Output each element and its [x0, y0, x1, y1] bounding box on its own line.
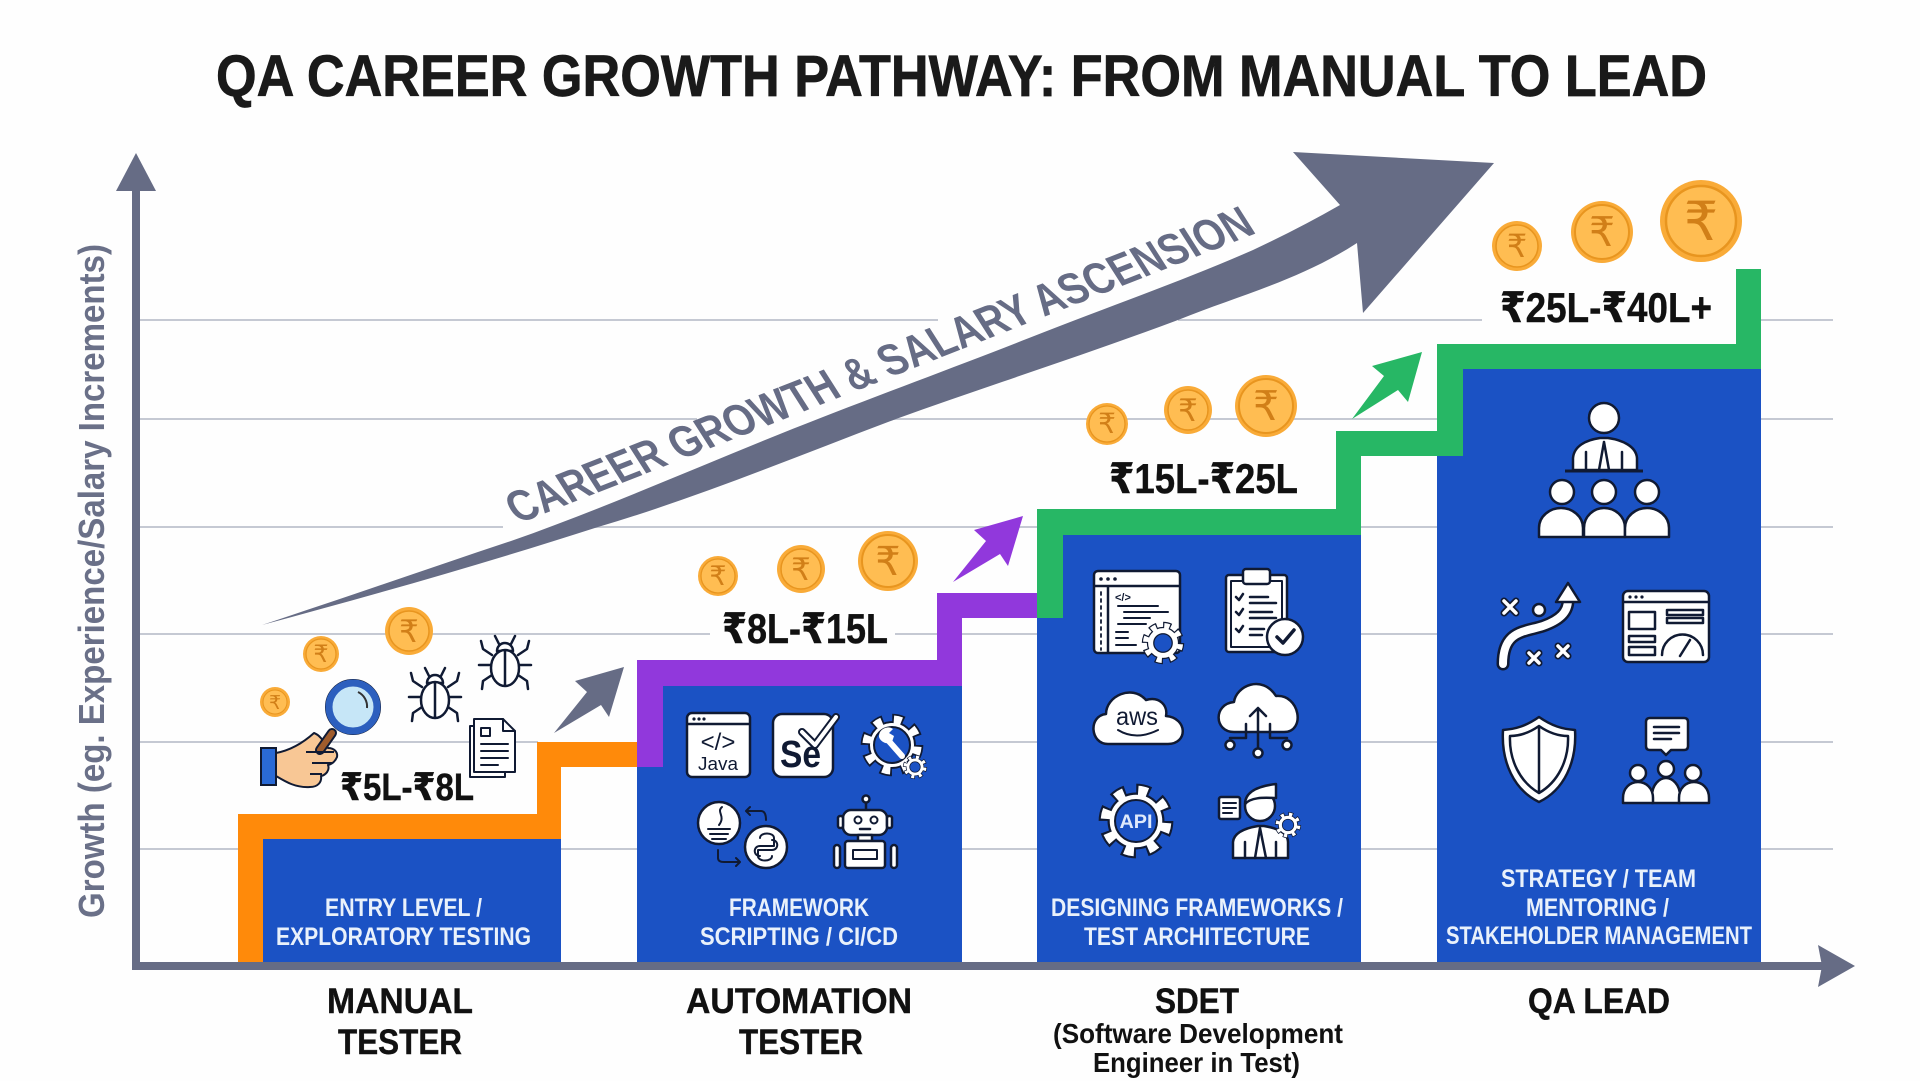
manual tester description: EXPLORATORY TESTING [276, 923, 531, 951]
step arrow: gray [554, 667, 624, 733]
title: QA CAREER GROWTH PATHWAY: FROM MANUAL TO LEAD [216, 44, 1707, 109]
coins: qa lead: ₹ [1684, 192, 1718, 252]
icon: selenium: Se [780, 734, 821, 776]
salary: qa lead: ₹25L-₹40L+ [1500, 284, 1712, 331]
icon: team discussion [1623, 718, 1709, 803]
coins: sdet [1086, 375, 1297, 445]
role labels: TESTER [739, 1023, 863, 1062]
role labels: QA LEAD [1528, 982, 1670, 1021]
icon: cloud upload [1219, 684, 1298, 758]
step arrow: purple [953, 516, 1023, 582]
icon: dashboard [1623, 591, 1709, 662]
column: sdet [1037, 431, 1437, 962]
coins: automation: ₹ [875, 540, 901, 584]
icon: selenium [773, 714, 836, 777]
column: automation tester [637, 593, 1037, 962]
salary: manual: ₹5L-₹8L [340, 767, 474, 809]
role labels: MANUAL [327, 982, 473, 1021]
coins: manual [260, 607, 433, 717]
icon: hand with magnifier [261, 680, 380, 787]
icon: gear wrench [867, 720, 925, 777]
role labels: TESTER [338, 1023, 462, 1062]
icon: checklist clipboard [1226, 569, 1303, 655]
qa lead description: STAKEHOLDER MANAGEMENT [1446, 922, 1752, 950]
icon: java code window: </> [701, 729, 735, 756]
career growth arrow [262, 152, 1494, 625]
icon: engineer with gear [1219, 784, 1299, 858]
icon: strategy arrow [1503, 583, 1580, 664]
automation description: FRAMEWORK [729, 894, 869, 922]
salary: automation: ₹8L-₹15L [722, 605, 888, 652]
coins: sdet: ₹ [1098, 408, 1116, 439]
coins: qa lead [1492, 180, 1742, 271]
sdet description: DESIGNING FRAMEWORKS / [1051, 894, 1343, 922]
sdet description [1051, 894, 1343, 951]
qa lead description [1446, 865, 1752, 950]
icon: java and python [698, 802, 787, 868]
green step [1037, 431, 1437, 618]
role labels: Engineer in Test) [1093, 1047, 1300, 1078]
icon: bug 1 [409, 668, 461, 721]
icon: shield [1503, 717, 1575, 802]
icon: aws cloud [1093, 693, 1183, 744]
coins: qa lead: ₹ [1589, 209, 1615, 255]
role labels: SDET [1155, 982, 1239, 1021]
axes [116, 153, 1855, 987]
purple step [637, 593, 1037, 767]
qa lead description: MENTORING / [1526, 894, 1669, 922]
manual tester description [276, 894, 531, 951]
y-axis label: Growth (eg. Experience/Salary Increments) [71, 244, 112, 918]
coins: automation: ₹ [791, 552, 811, 587]
automation description: SCRIPTING / CI/CD [700, 923, 898, 951]
icon: code window with gear [1094, 571, 1180, 660]
role labels: (Software Development [1053, 1018, 1343, 1049]
coins: automation [698, 531, 918, 596]
icon: api gear: API [1120, 812, 1152, 833]
manual tester description: ENTRY LEVEL / [325, 894, 482, 922]
icon: bug 2 [479, 636, 531, 689]
qa lead description: STRATEGY / TEAM [1501, 865, 1696, 893]
role labels: AUTOMATION [686, 982, 912, 1021]
icon: java code window [687, 713, 750, 777]
coins: manual: ₹ [313, 641, 329, 668]
icon: document [470, 719, 515, 777]
icon: java code window: Java [698, 754, 739, 774]
column: qa lead [1437, 269, 1761, 962]
icon: api gear [1106, 791, 1166, 851]
column: manual tester [238, 742, 638, 962]
automation description [700, 894, 898, 951]
icon: team leader [1539, 403, 1669, 537]
salary: sdet: ₹15L-₹25L [1109, 455, 1298, 502]
coins: manual: ₹ [399, 614, 419, 649]
icon: code window with gear: </> [1115, 592, 1131, 604]
green top step [1437, 269, 1761, 456]
icon: aws cloud: aws [1116, 703, 1158, 731]
orange step [238, 742, 638, 962]
sdet description: TEST ARCHITECTURE [1084, 923, 1310, 951]
arrow caption: CAREER GROWTH & SALARY ASCENSION [495, 197, 1263, 533]
coins: sdet: ₹ [1178, 393, 1198, 428]
coins: manual: ₹ [269, 693, 281, 714]
step arrow: green [1352, 352, 1422, 419]
coins: qa lead: ₹ [1507, 228, 1527, 264]
coins: sdet: ₹ [1253, 383, 1279, 429]
role labels [327, 982, 1670, 1078]
icon: robot [834, 796, 897, 868]
coins: automation: ₹ [709, 561, 727, 591]
